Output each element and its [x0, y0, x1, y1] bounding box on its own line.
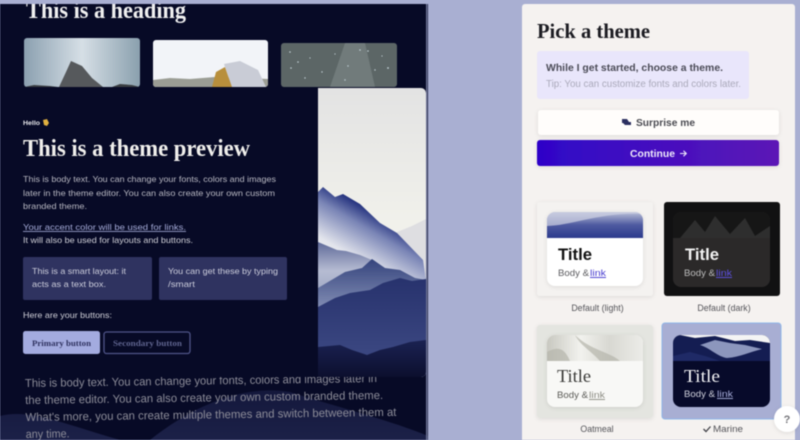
panel: theme preview card [0, 4, 428, 440]
theme card: marine selected: Title [684, 366, 720, 386]
callout: While I get started, choose a theme. [546, 62, 723, 74]
smart layout box 2 [159, 257, 287, 300]
continue button: Continue [630, 148, 675, 160]
secondary button [104, 332, 190, 354]
panel: pick a theme [522, 4, 795, 440]
image: starry sky [281, 43, 397, 87]
icon: dice [622, 119, 631, 125]
smart layout box 1 [23, 257, 152, 300]
theme card: marine selected: Body & [684, 389, 716, 400]
greeting [23, 119, 49, 127]
label: default light: Default (light) [571, 303, 624, 313]
icon: waving hand [43, 119, 49, 126]
body text behind card: the theme editor. You can also create your own custom branded theme. [25, 390, 383, 407]
theme card: default light: Body & [558, 268, 590, 279]
label: marine: Marine [713, 424, 743, 434]
title: This is a theme preview [23, 136, 251, 162]
theme card: oatmeal [537, 325, 653, 418]
help button [774, 406, 800, 432]
theme card: marine selected: link [717, 389, 733, 400]
body text: This is body text. You can change your fonts, colors and images [23, 175, 276, 184]
image: tent [153, 40, 268, 87]
primary button: Primary button [32, 339, 92, 348]
help button: ? [784, 414, 791, 426]
accent link: Your accent color will be used for links. [23, 223, 186, 232]
body text behind card: What's more, you can create multiple themes and switch between them at [25, 407, 397, 424]
image: mountain range [318, 88, 426, 377]
callout [537, 51, 749, 99]
theme card: default dark: Title [685, 245, 719, 264]
heading: Pick a theme [537, 19, 650, 43]
theme card: oatmeal: Body & [557, 390, 589, 401]
background mountains [0, 390, 428, 440]
smart layout box 2: You can get these by typing [168, 266, 278, 276]
label: default dark: Default (dark) [697, 303, 751, 313]
greeting: Hello [23, 121, 40, 127]
surprise button: Surprise me [636, 117, 695, 129]
body text behind card: This is body text. You can change your fonts, colors and images later in [25, 373, 377, 390]
secondary button: Secondary button [113, 339, 183, 348]
body text [23, 175, 276, 211]
theme card: marine selected [662, 323, 781, 419]
smart layout box 1: acts as a text box. [32, 279, 106, 289]
image: mountain peak [24, 38, 140, 87]
label: marine [704, 424, 743, 434]
body text: branded theme. [23, 202, 87, 211]
theme card: default dark: Body & [684, 268, 716, 279]
buttons label: Here are your buttons: [23, 311, 112, 320]
icon: arrow [680, 151, 686, 156]
label: oatmeal: Oatmeal [580, 424, 614, 434]
continue button [537, 140, 779, 166]
theme card: oatmeal: Title [557, 366, 591, 386]
theme card: default light [537, 202, 653, 296]
theme card: default light: Title [558, 245, 592, 264]
theme card: default light: link [590, 268, 606, 279]
panel: editor document [0, 0, 428, 440]
theme card: default dark: link [716, 268, 732, 279]
surprise button [538, 110, 779, 135]
callout: Tip: You can customize fonts and colors later. [546, 79, 741, 90]
body text behind card [25, 373, 397, 440]
smart layout box 2: /smart [168, 279, 196, 289]
link note: It will also be used for layouts and buttons. [23, 236, 193, 245]
body text: later in the theme editor. You can also create your own custom [23, 189, 275, 198]
theme card: default dark [664, 202, 780, 296]
smart layout box 1: This is a smart layout: it [32, 266, 127, 276]
theme card: oatmeal: link [589, 390, 605, 401]
primary button [23, 331, 100, 354]
